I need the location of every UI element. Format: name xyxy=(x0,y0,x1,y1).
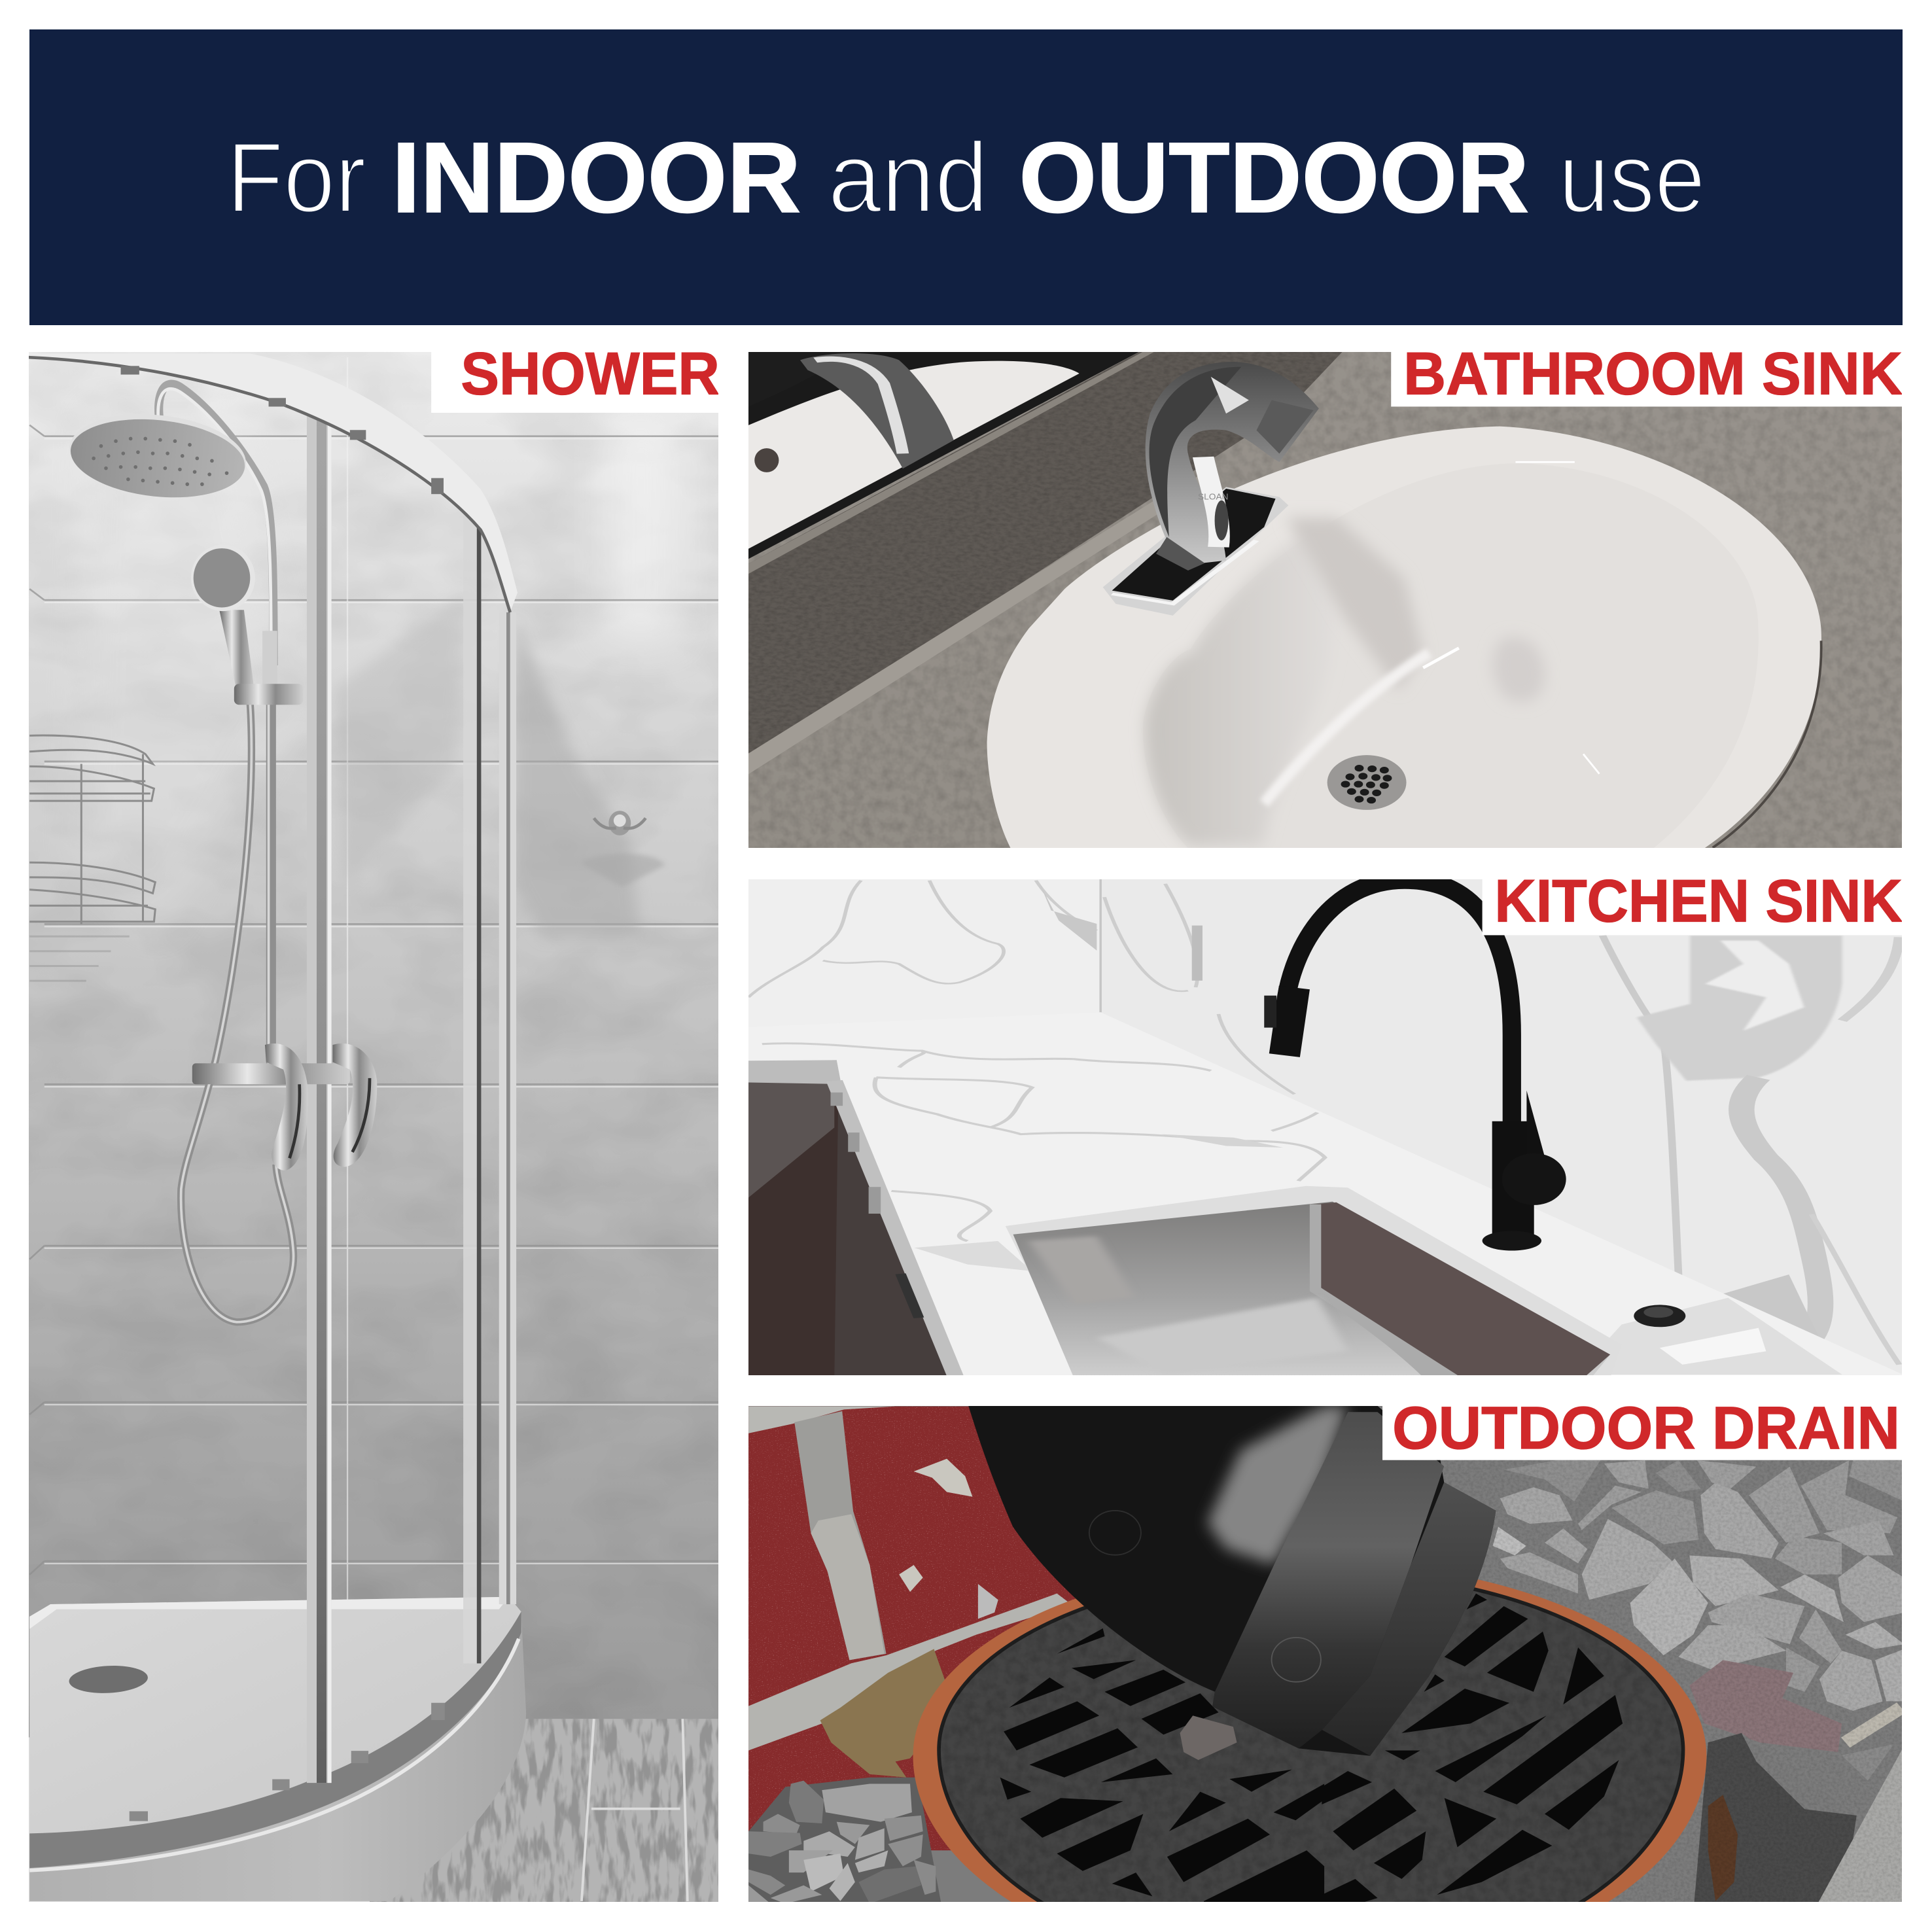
towel hook xyxy=(579,811,665,887)
base cabinets xyxy=(748,1060,964,1378)
shower floor planks xyxy=(370,1719,727,1904)
heading: For INDOOR and OUTDOOR use: use xyxy=(1558,122,1705,234)
panel: bathroom sink photo xyxy=(748,352,1902,848)
countertop xyxy=(739,350,1910,855)
door handles and mixer xyxy=(192,1044,377,1170)
hand shower xyxy=(181,544,303,1322)
faucet deck plate xyxy=(1103,487,1288,616)
faucet xyxy=(1146,362,1319,571)
sink drain xyxy=(1327,755,1407,810)
tiled wall xyxy=(0,345,739,1737)
sink bowl xyxy=(987,427,1821,850)
heading: For INDOOR and OUTDOOR use: For xyxy=(227,122,366,234)
mirror and reflection xyxy=(739,350,1142,564)
drain grate xyxy=(939,1571,1683,1932)
label: SHOWER xyxy=(431,340,727,413)
heading: For INDOOR and OUTDOOR use: INDOOR xyxy=(392,122,801,234)
riser rod and shower arm xyxy=(158,384,277,1072)
shower tray xyxy=(29,1597,526,1901)
marble walls xyxy=(739,877,1926,1378)
title banner xyxy=(29,29,1903,325)
air switch button xyxy=(1634,1305,1685,1327)
backsplash xyxy=(739,350,1344,774)
door rails xyxy=(307,413,516,1783)
panel: outdoor drain photo xyxy=(748,1406,1902,1902)
heading: For INDOOR and OUTDOOR use: and xyxy=(828,122,988,234)
curved top rail xyxy=(28,354,518,612)
marble veins right wall xyxy=(1602,936,1899,1365)
panel: shower photo xyxy=(29,352,718,1902)
countertop xyxy=(739,1012,1903,1378)
black faucet xyxy=(1264,880,1566,1251)
rain shower head xyxy=(65,406,250,506)
heading: For INDOOR and OUTDOOR use: OUTDOOR xyxy=(1019,122,1529,234)
black elbow pipe xyxy=(968,1406,1496,1756)
heading: For INDOOR and OUTDOOR use xyxy=(227,122,1705,234)
dry leaf xyxy=(820,1649,947,1778)
red brick wall xyxy=(748,1407,1115,1850)
drain ring xyxy=(913,1561,1706,1932)
left gravel xyxy=(748,1778,943,1914)
wire shelf basket xyxy=(29,735,155,981)
panel: kitchen sink photo xyxy=(748,879,1902,1375)
stainless sink xyxy=(1006,1186,1622,1378)
right gravel xyxy=(1322,1407,1916,1914)
faucet: SLOAN xyxy=(1198,492,1228,502)
